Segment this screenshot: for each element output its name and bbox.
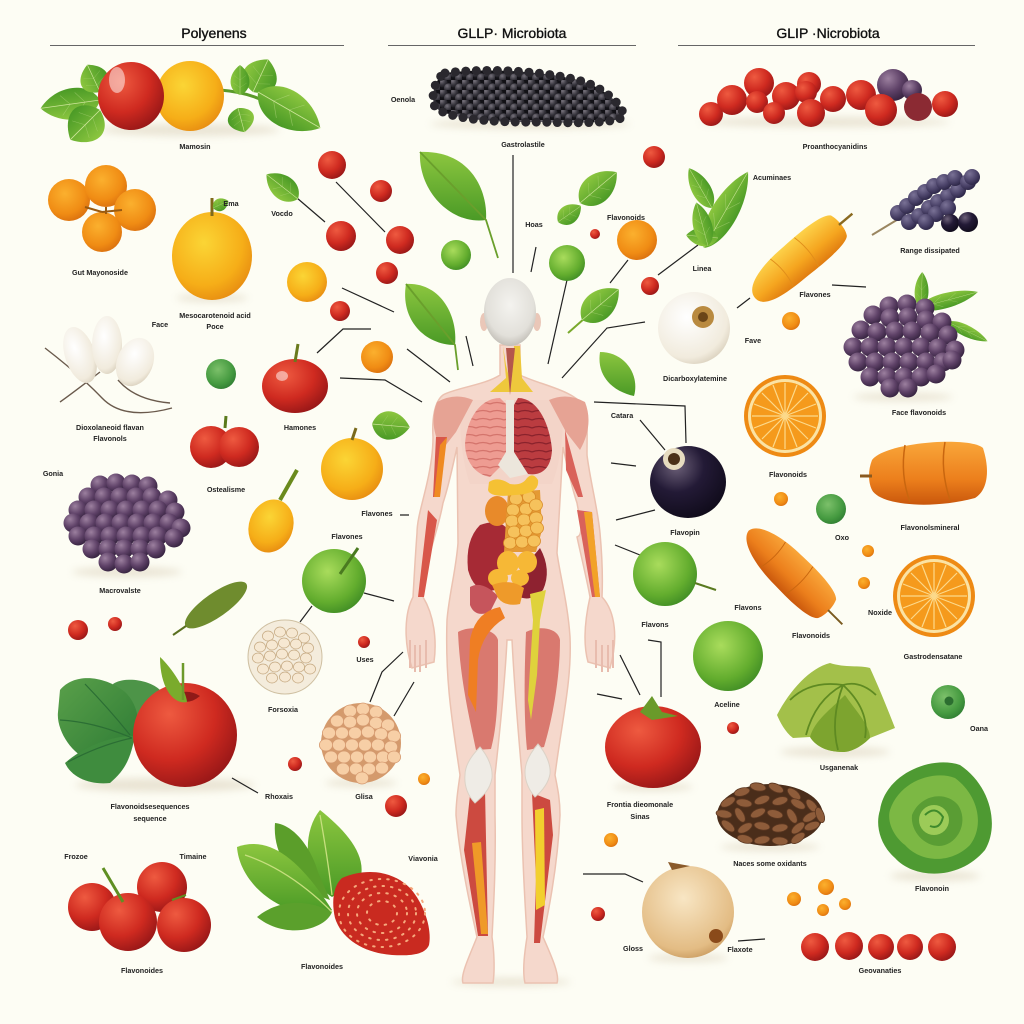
food: large orange carrot: [860, 442, 987, 505]
small text labels: Face flavonoids: [892, 408, 946, 417]
small text labels: Flaxote: [727, 945, 753, 954]
small text labels: Ema: [223, 199, 240, 208]
small text labels: Ostealisme: [207, 485, 245, 494]
right arm muscles: [565, 430, 583, 497]
small text labels: Flavones: [331, 532, 363, 541]
small text labels: Fave: [745, 336, 761, 345]
food: tomato: [605, 696, 739, 788]
small text labels: Flavonoids: [769, 470, 807, 479]
small text labels: Flavonoides: [121, 966, 163, 975]
green yellow vessel: [528, 590, 546, 720]
small text labels: Linea: [693, 264, 712, 273]
food: three tomatoes: [68, 862, 211, 952]
food: green apple: [302, 548, 366, 613]
small text labels: Gastrodensatane: [904, 652, 962, 661]
liver: [485, 496, 509, 526]
food: grape cluster with leaves: [844, 272, 990, 398]
text: Oenola label: Oenola: [391, 95, 416, 104]
pink bowel: [470, 585, 498, 614]
food: tomato with spinach leaves: [58, 657, 237, 787]
food: green lettuce: [878, 762, 992, 874]
heading: GLLP Microbiota: GLLP· Microbiota: [458, 25, 567, 41]
central diaphragm: [498, 400, 528, 478]
left thigh muscle: [458, 628, 498, 750]
food: dark grape stem: [872, 169, 980, 235]
small text labels: Gut Mayonoside: [72, 268, 128, 277]
small text labels: [43, 173, 989, 975]
food: peach bead cluster: [319, 703, 401, 784]
small text labels: Dicarboxylatemine: [663, 374, 727, 383]
food: seed bowl: [248, 620, 322, 694]
food: green apples: [633, 542, 763, 691]
red intestine mass: [468, 522, 508, 591]
right shin: [532, 793, 553, 943]
knees: [465, 744, 550, 803]
colon beads: [504, 490, 544, 552]
text: label row one: [179, 140, 867, 151]
ears and head: [480, 278, 541, 346]
food: tan onion: [642, 862, 734, 958]
leader lines: [232, 155, 866, 941]
small text labels: Mesocarotenoid acid: [179, 311, 251, 320]
small text labels: sequence: [133, 814, 167, 823]
small text labels: Catara: [611, 411, 634, 420]
small text labels: Macrovalste: [99, 586, 141, 595]
small text labels: Gonia: [43, 469, 64, 478]
food: floating leaves left: [259, 152, 498, 441]
small text labels: Uses: [356, 655, 374, 664]
right thigh muscle: [525, 628, 560, 750]
food: floating items right of body: [441, 146, 665, 396]
neck vessel: [506, 348, 515, 395]
ribcage border: [460, 400, 563, 484]
left upper arm orange: [434, 437, 447, 497]
food: red apple: [262, 344, 328, 413]
small text labels: Flavonoids: [607, 213, 645, 222]
small text labels: Flavones: [361, 509, 393, 518]
food: orange slice lower: [893, 555, 975, 637]
small text labels: Hamones: [284, 423, 316, 432]
food: small berries bottom right: [591, 833, 956, 961]
small text labels: Sinas: [630, 812, 650, 821]
small text labels: Flavonoidsesequences: [110, 802, 190, 811]
pelvic orange vessel: [468, 607, 505, 712]
small text labels: Glisa: [355, 792, 374, 801]
left shin: [464, 790, 488, 936]
food: small red berries left: [68, 617, 430, 817]
body silhouette: [406, 345, 615, 983]
small text labels: Noxide: [868, 608, 892, 617]
small text labels: Forsoxia: [268, 705, 299, 714]
left arm muscles: [418, 437, 447, 597]
text: label row one: Proanthocyanidins: [803, 142, 867, 151]
small text labels: Viavonia: [408, 854, 439, 863]
food: yellow carrot: [741, 199, 865, 311]
small text labels: Flavopin: [670, 528, 700, 537]
food: red and yellow fruit with leaves: [38, 52, 330, 153]
food: strawberry with leaves: [237, 810, 430, 955]
food: yellow pear: [241, 470, 301, 559]
food: pickle: [173, 574, 253, 636]
food: diagonal carrot: [734, 516, 857, 639]
text: label row one: Mamosin: [179, 142, 211, 151]
right forearm muscles: [577, 510, 600, 597]
small text labels: Flavonols: [93, 434, 127, 443]
food: orange cluster: [48, 165, 156, 252]
food: small round berries: [206, 151, 414, 389]
small text labels: Flavonoides: [301, 962, 343, 971]
heading: GLIP Microbiota: GLIP ·Nicrobiota: [776, 25, 880, 41]
small text labels: Face: [152, 320, 168, 329]
stomach: [488, 475, 538, 496]
small text labels: Gloss: [623, 944, 643, 953]
right dark organ: [518, 548, 547, 598]
anatomy figure: [406, 278, 615, 983]
small text labels: Flavons: [641, 620, 669, 629]
small text labels: Flavones: [799, 290, 831, 299]
food: white onion: [658, 292, 800, 364]
neck nerves: [490, 346, 533, 392]
small text labels: Vocdo: [271, 209, 293, 218]
small text labels: Rhoxais: [265, 792, 293, 801]
soft shadows under foods: [72, 117, 980, 986]
heading: Polyenens: Polyenens: [181, 25, 247, 41]
small text labels: Frontia dieomonale: [607, 800, 673, 809]
shoulder muscles: [433, 396, 589, 450]
small text labels: Poce: [206, 322, 224, 331]
small text labels: Usganenak: [820, 763, 858, 772]
food: coffee beans: [715, 781, 826, 846]
food: pale lettuce: [777, 663, 895, 752]
food: orange slice top: [744, 375, 826, 457]
hand lines: [410, 640, 613, 672]
right shin yellow: [535, 808, 545, 910]
food: black berry cob: [433, 70, 624, 123]
small text labels: Naces some oxidants: [733, 859, 807, 868]
small text labels: Flavons: [734, 603, 762, 612]
food: small mixed balls: [774, 492, 874, 589]
small text labels: Timaine: [179, 852, 207, 861]
food: yellow-orange fruit: [321, 428, 383, 500]
small text labels: Oana: [970, 724, 989, 733]
small text labels: Geovanaties: [859, 966, 901, 975]
small text labels: Flavonoids: [792, 631, 830, 640]
food: purple grape cluster: [64, 474, 190, 574]
small text labels: Frozoe: [64, 852, 88, 861]
left shin orange: [472, 842, 488, 934]
small text labels: Oxo: [835, 533, 850, 542]
text: label row one: Gastrolastile: [501, 140, 545, 149]
small text labels: Aceline: [714, 700, 740, 709]
small text labels: Acuminaes: [753, 173, 791, 182]
food: dark plum: [650, 446, 726, 518]
small text labels: Range dissipated: [900, 246, 960, 255]
left lung: [465, 398, 507, 477]
small text labels: Hoas: [525, 220, 543, 229]
food: leaf cluster: [681, 163, 759, 255]
small text labels: Dioxolaneoid flavan: [76, 423, 144, 432]
right forearm orange: [584, 512, 600, 597]
food: green ball: [931, 685, 965, 719]
right lung: [514, 398, 552, 474]
lower yellow blobs: [488, 551, 537, 605]
food: white garlic petals: [45, 316, 172, 413]
food: red double fruit: [190, 416, 259, 468]
small text labels: Flavonoin: [915, 884, 949, 893]
food: yellow fruit: [172, 195, 252, 300]
food: red berries group: [699, 68, 958, 127]
small text labels: Flavonolsmineral: [900, 523, 960, 532]
